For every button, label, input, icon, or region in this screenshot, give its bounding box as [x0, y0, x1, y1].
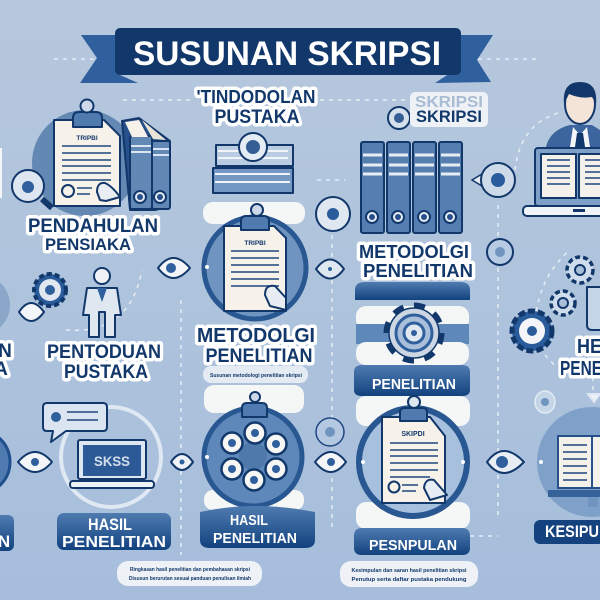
label: PENTODUAN: [47, 342, 161, 363]
panel: metodologi column: [315, 92, 524, 587]
icon: gears: [512, 257, 593, 351]
label bar: HASIL: [88, 515, 132, 534]
icon: clipboard document: TRIPBI: [244, 240, 266, 247]
white band: [204, 490, 304, 510]
caption pill: Kesimpulan dan saran hasil penelitian skripsi: [352, 568, 467, 574]
white band: [203, 202, 305, 224]
icon: eye: [18, 452, 52, 472]
icon: eye badge: [388, 107, 410, 129]
icon: chat bubble: [43, 403, 107, 442]
caption pill: Disusun berurutan sesuai panduan penulisan ilmiah: [129, 576, 252, 582]
label bar: [354, 528, 470, 555]
ring: [61, 407, 161, 507]
white band: [356, 502, 470, 529]
caption pill: Susunan metodologi penelitian skripsi: [210, 373, 302, 379]
label: METODOLGI: [197, 325, 315, 347]
icon: document circle: [32, 110, 138, 216]
icon: clipboard document: [224, 204, 286, 311]
label: PUSTAKA: [64, 362, 148, 383]
title: SUSUNAN SKRIPSI: [133, 35, 441, 73]
title ribbon: [80, 28, 493, 83]
icon: badge: [535, 391, 555, 413]
caption pill: Ringkasan hasil penelitian dan pembahasan skripsi: [130, 567, 250, 573]
icon: person: [83, 268, 121, 337]
icon: eye: [487, 451, 524, 473]
icon: clipboard document: TRIPBI: [76, 135, 98, 142]
icon: eye badge: [316, 197, 350, 231]
icon: eye: [316, 260, 344, 278]
caption pill: [203, 366, 308, 383]
label: PUSTAKA: [214, 107, 300, 128]
caption pill: Penutup serta daftar pustaka pendukung: [352, 577, 466, 583]
icon: laptop: SKSS: [94, 453, 130, 469]
icon: eye badge: [487, 239, 513, 265]
skripsi tag: SKRIPSI: [415, 94, 483, 111]
icon: eye: [158, 258, 190, 278]
white band: [356, 396, 470, 426]
panel: tinjauan pustaka: [117, 87, 316, 586]
icon: binders: [361, 142, 462, 233]
icon: laptop: [70, 440, 154, 488]
caption pill: [117, 561, 262, 586]
icon: clipboard document: [54, 100, 120, 206]
panel: hasil laptop: [18, 403, 193, 551]
skripsi tag: [410, 92, 488, 127]
label bar: [200, 506, 315, 548]
icon: clipboard document: [382, 396, 447, 503]
icon: document circle: [359, 408, 467, 516]
label bar: [57, 513, 171, 551]
icon: db stack: [354, 282, 470, 396]
icon: phone: [587, 287, 600, 330]
icon: magnifier: [12, 170, 52, 208]
label: PENELITIAN: [206, 346, 312, 367]
caption pill: [340, 561, 478, 587]
label: PENELITIAN: [372, 376, 456, 393]
icon: book circle: [537, 407, 600, 517]
connector lines: [54, 59, 593, 555]
icon: eye: [315, 452, 346, 472]
icon: eye: [19, 303, 44, 321]
icon: eye badge: [472, 163, 515, 197]
label: METODOLGI: [359, 241, 469, 262]
label: PENDAHULAN: [28, 215, 158, 237]
panel: right column: [512, 82, 600, 544]
left edge fragments: [0, 148, 14, 551]
icon: books: [122, 118, 170, 210]
panel: pendahuluan: [12, 100, 190, 278]
label bar: PENELITIAN: [62, 534, 166, 551]
skripsi tag: SKRIPSI: [416, 107, 482, 126]
label bar: [534, 520, 600, 544]
icon: laptop with book: [523, 148, 600, 216]
icon: eye badge: [316, 418, 344, 446]
icon: eye: [171, 454, 193, 470]
icon: gear badge: [34, 274, 66, 306]
label bar: PENELITIAN: [213, 530, 297, 547]
icon: person: [546, 82, 600, 147]
panel: person: [19, 268, 161, 383]
label: PENSIAKA: [45, 236, 131, 254]
label: 'TINDODOLAN: [196, 87, 316, 107]
icon: document circle: [204, 217, 306, 319]
label bar: PESNPULAN: [369, 537, 457, 554]
label: PENELITIAN: [363, 260, 473, 281]
icon: heart: [588, 394, 600, 402]
icon: clipboard document: SKIPDI: [401, 431, 425, 438]
icon: network circle: [204, 392, 302, 506]
icon: book stack: [213, 133, 293, 193]
white band: [204, 385, 304, 413]
label bar: HASIL: [230, 512, 268, 529]
